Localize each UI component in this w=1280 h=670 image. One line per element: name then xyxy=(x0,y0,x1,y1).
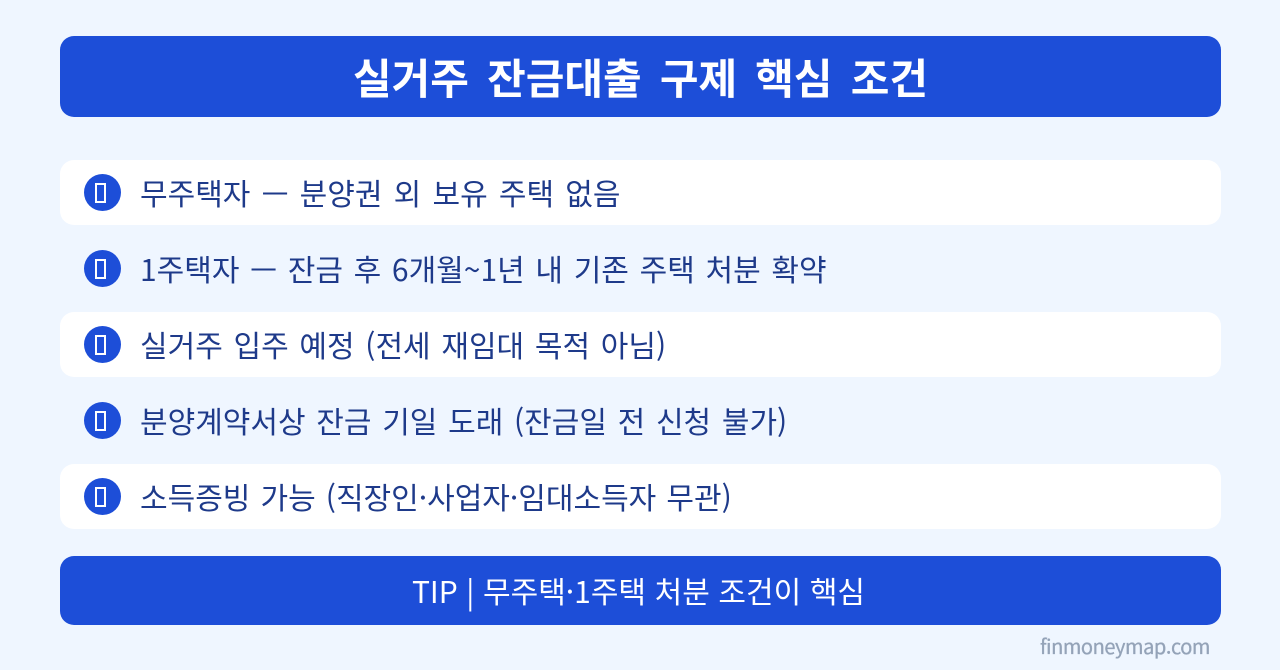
icon: bullet 2 xyxy=(84,250,121,287)
title banner: 실거주 잔금대출 구제 핵심 조건 xyxy=(353,46,928,107)
footer: site name: finmoneymap.com xyxy=(1040,631,1210,660)
icon: bullet 1 xyxy=(84,174,121,211)
title banner xyxy=(60,36,1221,117)
condition row 3 xyxy=(60,312,1221,377)
text: condition 2: 1주택자 — 잔금 후 6개월~1년 내 기존 주택 처분 확약 xyxy=(140,246,827,290)
icon: bullet 3 xyxy=(84,326,121,363)
icon: bullet 5 xyxy=(84,478,121,515)
condition row 1 xyxy=(60,160,1221,225)
text: condition 3: 실거주 입주 예정 (전세 재임대 목적 아님) xyxy=(140,322,666,366)
tip banner xyxy=(60,556,1221,625)
text: condition 4: 분양계약서상 잔금 기일 도래 (잔금일 전 신청 불가) xyxy=(140,398,787,442)
condition row 4 xyxy=(84,398,787,442)
text: condition 1: 무주택자 — 분양권 외 보유 주택 없음 xyxy=(140,170,620,214)
condition row 2 xyxy=(84,246,827,290)
condition row 5 xyxy=(60,464,1221,529)
tip banner: TIP | 무주택·1주택 처분 조건이 핵심 xyxy=(412,568,865,612)
icon: bullet 4 xyxy=(84,402,121,439)
text: condition 5: 소득증빙 가능 (직장인·사업자·임대소득자 무관) xyxy=(140,474,732,518)
